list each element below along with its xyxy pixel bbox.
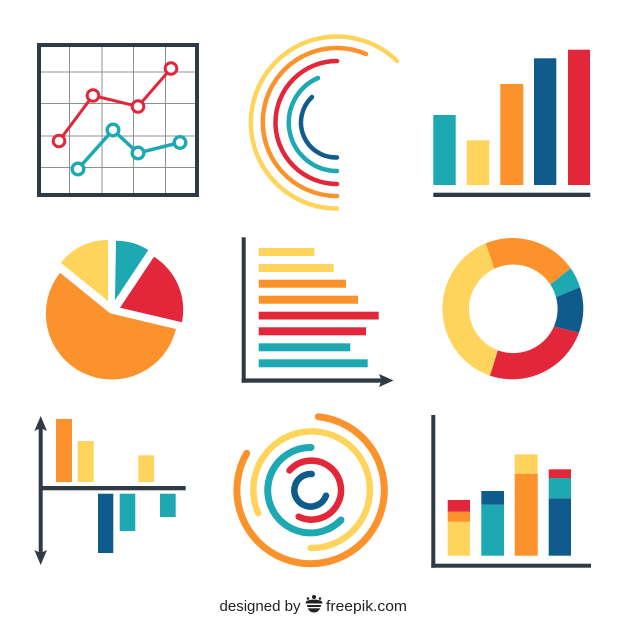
footer credit: designed by	[220, 599, 301, 615]
panel: exploded pie chart	[46, 240, 183, 380]
panel: stacked column chart	[431, 415, 591, 568]
panel: line chart	[37, 43, 199, 197]
footer credit: freepik.com	[326, 599, 407, 615]
panel: concentric arcs chart	[251, 37, 397, 209]
icon: freepik bee	[306, 595, 322, 612]
footer credit	[220, 595, 407, 615]
panel: column chart	[433, 50, 590, 197]
red data line	[53, 63, 177, 147]
axes with arrows	[34, 416, 186, 565]
panel: positive and negative bar chart	[34, 416, 186, 565]
axes with arrow	[242, 237, 394, 387]
panel: donut chart	[442, 238, 583, 379]
axes	[431, 415, 591, 568]
panel: horizontal bar chart	[242, 237, 394, 387]
teal data line	[72, 124, 186, 175]
panel: spiral arcs chart	[237, 417, 384, 564]
